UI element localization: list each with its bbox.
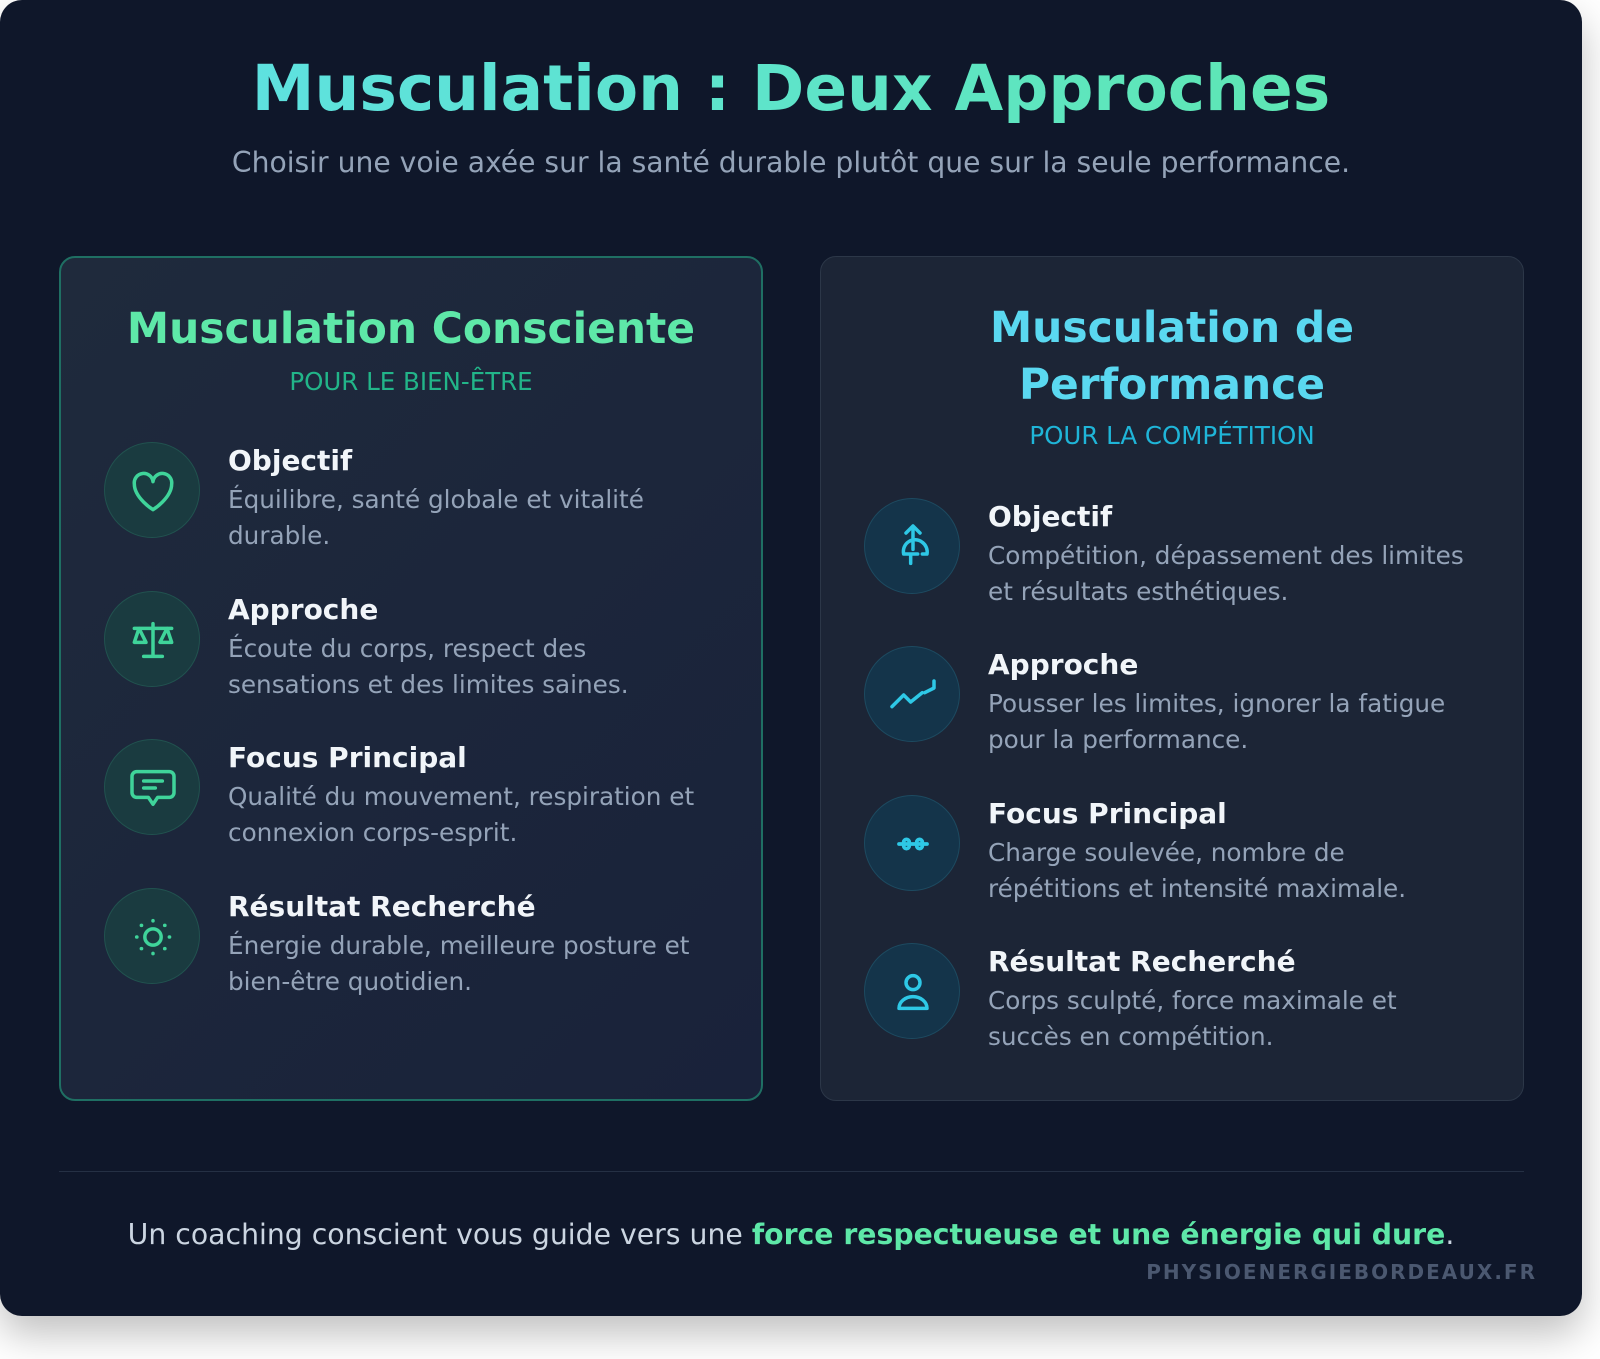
- item: objectif: Compétition, dépassement des limites et résultats esthétiques.: [988, 541, 1464, 606]
- icon: scale: [104, 591, 200, 687]
- item: approche: Approche: [988, 648, 1138, 681]
- icon: heart: [104, 442, 200, 538]
- footer text: Un coaching conscient vous guide vers une force respectueuse et une énergie qui dure.: [128, 1218, 1454, 1251]
- subtitle: Choisir une voie axée sur la santé durable plutôt que sur la seule performance.: [232, 146, 1350, 179]
- item: objectif: [864, 498, 1464, 606]
- item: résultat: Résultat Recherché: [228, 890, 536, 923]
- panel: performance: [820, 256, 1524, 1101]
- item: approche: Pousser les limites, ignorer la fatigue pour la performance.: [988, 689, 1445, 754]
- tag: compétition: POUR LA COMPÉTITION: [1029, 421, 1315, 450]
- item: résultat: [864, 943, 1397, 1050]
- tag: bien-être: POUR LE BIEN-ÊTRE: [289, 367, 533, 396]
- icon: dumbbell: [864, 795, 960, 891]
- heading: performance: Musculation de: [990, 303, 1354, 352]
- item: objectif: Objectif: [228, 444, 352, 477]
- item: approche: [864, 646, 1445, 754]
- title: Musculation : Deux Approches: [252, 52, 1330, 125]
- item: objectif: [104, 442, 644, 550]
- icon: trend: [864, 646, 960, 742]
- heading: performance: Performance: [1019, 360, 1325, 409]
- item: résultat: Résultat Recherché: [988, 945, 1296, 978]
- item: approche: Écoute du corps, respect des sensations et des limites saines.: [228, 634, 629, 698]
- heading: consciente: Musculation Consciente: [127, 304, 695, 353]
- item: résultat: [104, 888, 690, 996]
- item: focus: [104, 739, 694, 846]
- item: objectif: Objectif: [988, 500, 1112, 533]
- item: approche: [104, 591, 629, 698]
- item: focus: Focus Principal: [988, 797, 1227, 830]
- item: approche: Approche: [228, 593, 378, 626]
- item: objectif: Équilibre, santé globale et vitalité durable.: [228, 485, 644, 550]
- item: focus: Focus Principal: [228, 741, 467, 774]
- icon: trophy-ish: [864, 498, 960, 594]
- item: focus: Charge soulevée, nombre de répétitions et intensité maximale.: [988, 838, 1406, 902]
- icon: message: [104, 739, 200, 835]
- item: résultat: Énergie durable, meilleure posture et bien-être quotidien.: [228, 931, 690, 996]
- heading: performance: [990, 303, 1354, 409]
- panel: consciente: [59, 256, 763, 1101]
- icon: sun: [104, 888, 200, 984]
- watermark: PHYSIOENERGIEBORDEAUX.FR: [1146, 1260, 1537, 1284]
- item: résultat: Corps sculpté, force maximale et succès en compétition.: [988, 986, 1397, 1050]
- icon: person: [864, 943, 960, 1039]
- item: focus: [864, 795, 1406, 902]
- title: [0, 52, 1582, 125]
- item: focus: Qualité du mouvement, respiration et connexion corps-esprit.: [228, 782, 694, 846]
